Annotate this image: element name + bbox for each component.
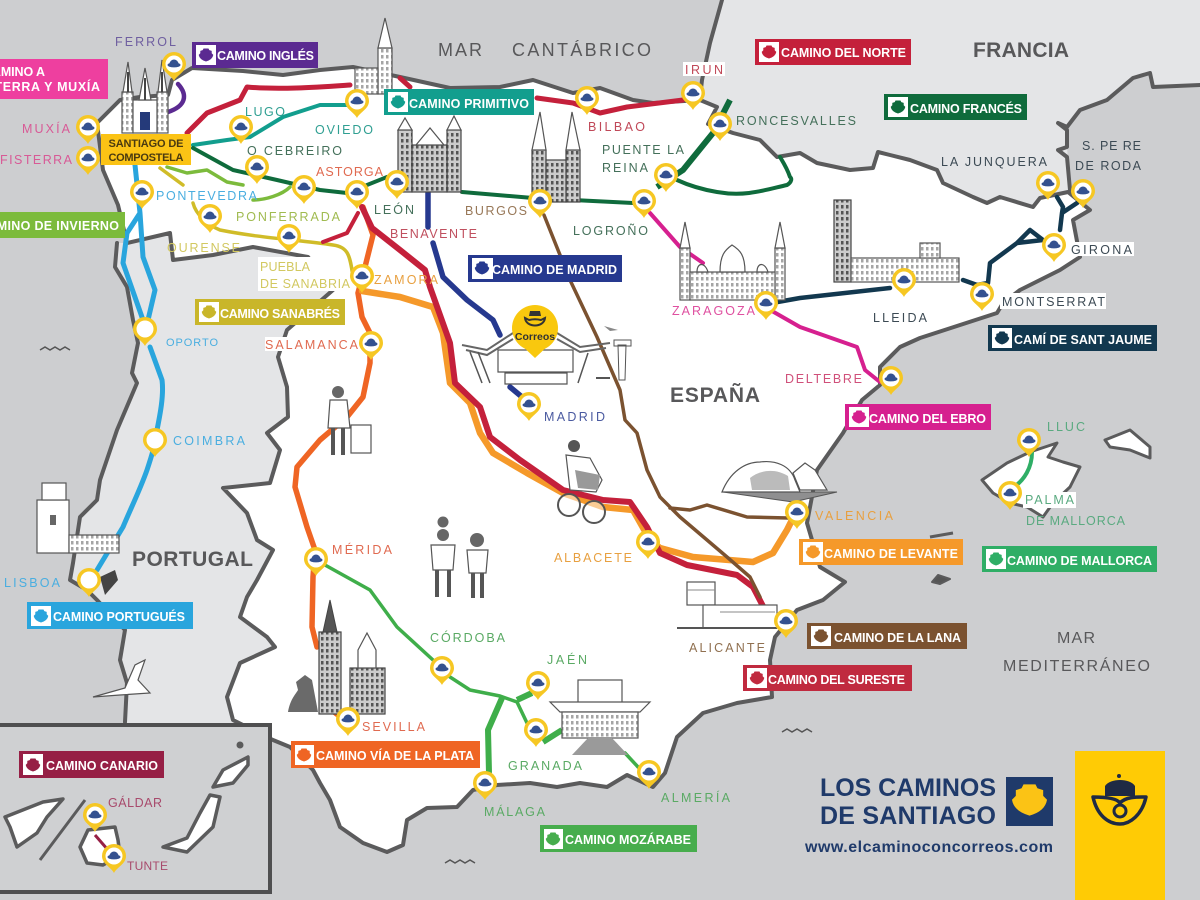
- route: Camino del Norte: [187, 78, 683, 133]
- place names: PUEBLA: [260, 260, 311, 274]
- badge: Camino del Sureste: [743, 665, 912, 691]
- place names: LUGO: [245, 105, 285, 119]
- place names: COIMBRA: [173, 434, 246, 448]
- figure: family: [431, 516, 488, 598]
- inset panel: Canary Islands: [0, 725, 270, 892]
- route: Camino de Invierno: [167, 167, 290, 200]
- route: Camino de Mallorca: [1014, 452, 1032, 487]
- place names: DE MALLORCA: [1026, 514, 1126, 528]
- island: Formentera: [932, 575, 950, 584]
- monument: Zaragoza basilica: [680, 222, 785, 300]
- sea and country names: CANTÁBRICO: [512, 40, 651, 60]
- place names: MÉRIDA: [332, 542, 393, 557]
- sea and country names: PORTUGAL: [132, 548, 253, 571]
- place names: IRUN: [685, 63, 723, 77]
- figure: sunbather: [93, 660, 150, 697]
- French Atlantic coast outline: [700, 0, 722, 98]
- badge: Camino Primitivo: [384, 89, 534, 115]
- route: link Astorga to Puebla: [323, 213, 358, 242]
- badge: Camino del Ebro: [845, 404, 991, 430]
- logo: Los Caminos de Santiago: [804, 774, 1053, 856]
- place names: MONTSERRAT: [1002, 295, 1105, 309]
- label: Santiago de Compostela: COMPOSTELA: [108, 152, 184, 164]
- logo: Los Caminos de Santiago: www.elcaminoconcorreos.com: [804, 839, 1053, 856]
- place names: ALBACETE: [554, 551, 632, 565]
- La Graciosa: [236, 742, 244, 748]
- place names: PALMA: [1025, 493, 1075, 507]
- place names: MUXÍA: [22, 121, 71, 136]
- badge: Camino de Levante: [799, 539, 963, 565]
- place names: DE SANABRIA: [260, 277, 351, 291]
- badge: Camino Primitivo: CAMINO PRIMITIVO: [409, 97, 529, 111]
- place names: LEÓN: [374, 202, 414, 217]
- badge: Camino Sanabrés: CAMINO SANABRÉS: [220, 306, 340, 321]
- Fuerteventura: [163, 795, 220, 852]
- place names: MADRID: [544, 410, 605, 424]
- Portuguese Atlantic coast outline: [70, 243, 138, 722]
- place names: ALMERÍA: [661, 790, 731, 805]
- monument: Lleida Seu Vella: [834, 200, 959, 282]
- place names: VALENCIA: [815, 509, 894, 523]
- figure: cyclist: [558, 440, 605, 523]
- badge: Camino Portugués: CAMINO PORTUGUÉS: [53, 609, 185, 624]
- Lanzarote: [213, 757, 248, 787]
- route: Camino Canario: [95, 835, 108, 850]
- pins: [76, 52, 1095, 873]
- place names: MÁLAGA: [484, 804, 546, 819]
- place names: O CEBREIRO: [247, 144, 342, 158]
- badge: Camino Sanabrés: [195, 299, 345, 325]
- monument: Belem tower: [37, 483, 119, 553]
- Balearic islands: [930, 430, 1150, 584]
- place names: GIRONA: [1071, 243, 1133, 257]
- badge: Camino Canario: CAMINO CANARIO: [46, 759, 158, 773]
- place names: ASTORGA: [316, 165, 384, 179]
- place names: LISBOA: [4, 576, 61, 590]
- place names: GÁLDAR: [108, 795, 162, 810]
- Correos marker: Correos: [515, 331, 555, 343]
- place names: PUENTE LA: [602, 143, 685, 157]
- badge: Camino de la Lana: [807, 623, 967, 649]
- badge: Camino del Norte: [755, 39, 911, 65]
- logo: Los Caminos de Santiago: DE SANTIAGO: [820, 802, 996, 830]
- place names: LOGROÑO: [573, 224, 648, 238]
- place names: REINA: [602, 161, 649, 175]
- badge: Camino Vía de la Plata: CAMINO VÍA DE LA PLATA: [316, 748, 474, 763]
- badge: Camino Mozárabe: [540, 825, 697, 852]
- route: Camino Francés Somport branch: [677, 157, 791, 194]
- badge: Camino de Mallorca: [982, 546, 1157, 572]
- route: Camino del Sureste: [362, 207, 765, 610]
- place names: FISTERRA: [0, 153, 73, 167]
- place names: OPORTO: [166, 337, 218, 349]
- route: Camino Francés to Roncesvalles: [657, 100, 730, 187]
- badge: Camino de Mallorca: CAMINO DE MALLORCA: [1007, 554, 1152, 568]
- badge: Camino Inglés: CAMINO INGLÉS: [217, 48, 314, 63]
- island: Ibiza: [930, 533, 953, 537]
- place names: LLEIDA: [873, 311, 928, 325]
- monument: Sevilla Giralda and Torre del Oro: [288, 600, 385, 714]
- place names: PONTEVEDRA: [156, 189, 258, 203]
- place names: OVIEDO: [315, 123, 373, 137]
- route: Camí de Sant Jaume: [772, 197, 1077, 303]
- monument: Madrid airport terminal: [462, 326, 631, 384]
- badge: Camino Mozárabe: CAMINO MOZÁRABE: [565, 832, 691, 847]
- badge: Camino de Levante: CAMINO DE LEVANTE: [824, 547, 958, 561]
- place names: LLUC: [1047, 420, 1085, 434]
- place names: BILBAO: [588, 120, 645, 134]
- badge: Camino Canario: [19, 751, 164, 778]
- French Mediterranean coast outline: [1058, 73, 1200, 190]
- badge: Camí de Sant Jaume: CAMÍ DE SANT JAUME: [1014, 332, 1152, 347]
- logo: Los Caminos de Santiago: LOS CAMINOS: [820, 774, 996, 802]
- sea waves: [40, 347, 812, 863]
- sea and country names: MAR: [438, 40, 482, 60]
- place names: ALICANTE: [689, 641, 765, 655]
- monument: León cathedral: [398, 116, 461, 192]
- badge: Camino Vía de la Plata: [291, 741, 480, 768]
- badge: Camino Francés: CAMINO FRANCÉS: [910, 101, 1022, 116]
- place names: ZAMORA: [374, 273, 439, 287]
- place names: TUNTE: [127, 859, 168, 873]
- route: Camino Sanabrés: [160, 168, 353, 277]
- route: Camino Portugués: [97, 165, 163, 570]
- Tenerife: [5, 799, 63, 847]
- routes: [97, 78, 1077, 773]
- route: Camino Vía de la Plata: [295, 207, 373, 715]
- Lisbon estuary: [100, 570, 118, 595]
- place names: OURENSE: [167, 241, 240, 255]
- Correos marker: [512, 305, 558, 358]
- badge: Camino Inglés: [192, 42, 318, 68]
- monument: Alhambra: [550, 680, 650, 755]
- route: Camino de Levante: [362, 291, 792, 562]
- badge: Camino a Fisterra y Muxía: [0, 59, 108, 99]
- separator line: [40, 800, 85, 860]
- route: Camino Francés: [193, 148, 633, 203]
- badge: Camino Portugués: [27, 602, 193, 629]
- sea and country names: MEDITERRÁNEO: [1003, 656, 1150, 675]
- place names: RONCESVALLES: [736, 114, 856, 128]
- route: Camino de la Lana: [544, 215, 788, 597]
- Gran Canaria: [80, 827, 120, 865]
- badge: Camino de Invierno: [0, 212, 125, 238]
- sea and country names: MAR: [1057, 630, 1095, 647]
- route: Camino Mozárabe: [316, 560, 638, 767]
- white label backgrounds: [258, 62, 1134, 508]
- logo: Correos yellow band: [1075, 751, 1165, 900]
- badge: Camino de Madrid: CAMINO DE MADRID: [492, 263, 617, 277]
- route: Camino Mozárabe branches: [488, 693, 562, 773]
- route: Camino de Madrid: [428, 193, 522, 397]
- panel: Portugal: [70, 233, 333, 724]
- monument: Valencia arts city: [722, 462, 837, 502]
- place names: BURGOS: [465, 204, 527, 218]
- badge: Camino del Sureste: CAMINO DEL SURESTE: [768, 673, 905, 687]
- monument: Burgos cathedral: [532, 112, 580, 202]
- place names: BENAVENTE: [390, 227, 477, 241]
- island: Menorca: [1105, 430, 1150, 458]
- sea and country names: ESPAÑA: [670, 384, 760, 407]
- place names: CÓRDOBA: [430, 630, 506, 645]
- place names: PONFERRADA: [236, 210, 341, 224]
- place names: JAÉN: [547, 652, 587, 667]
- monument: Santiago cathedral: [122, 60, 168, 133]
- badge: Camino del Ebro: CAMINO DEL EBRO: [869, 412, 986, 426]
- route: Camino Primitivo: [193, 105, 347, 145]
- place names: LA JUNQUERA: [941, 155, 1048, 169]
- figure: hiker: [328, 386, 371, 455]
- place names: SEVILLA: [362, 720, 426, 734]
- place names: DE RODA: [1075, 159, 1142, 173]
- route: Camino Inglés: [168, 84, 184, 112]
- label: Santiago de Compostela: [101, 134, 191, 165]
- route: Camino del Ebro: [650, 213, 880, 382]
- place names: FERROL: [115, 35, 176, 49]
- monument: Oviedo cathedral: [355, 18, 392, 94]
- badge: Camino del Norte: CAMINO DEL NORTE: [781, 46, 906, 60]
- badge: Camino de la Lana: CAMINO DE LA LANA: [834, 631, 961, 645]
- island: Mallorca: [982, 443, 1080, 517]
- sea and country names: [132, 39, 1150, 675]
- place names: SALAMANCA: [265, 338, 359, 352]
- monument: Alicante castle: [677, 582, 777, 628]
- badge: Camí de Sant Jaume: [988, 325, 1157, 351]
- badge: Camino Francés: [884, 94, 1027, 120]
- place names: DELTEBRE: [785, 372, 862, 386]
- panel: France: [695, 0, 1200, 240]
- sea and country names: FRANCIA: [973, 39, 1069, 62]
- place names: ZARAGOZA: [672, 304, 756, 318]
- label: Santiago de Compostela: SANTIAGO DE: [108, 138, 184, 150]
- place names: S. PE RE: [1082, 139, 1141, 153]
- place names: GRANADA: [508, 759, 583, 773]
- badge: Camino de Madrid: [468, 255, 622, 282]
